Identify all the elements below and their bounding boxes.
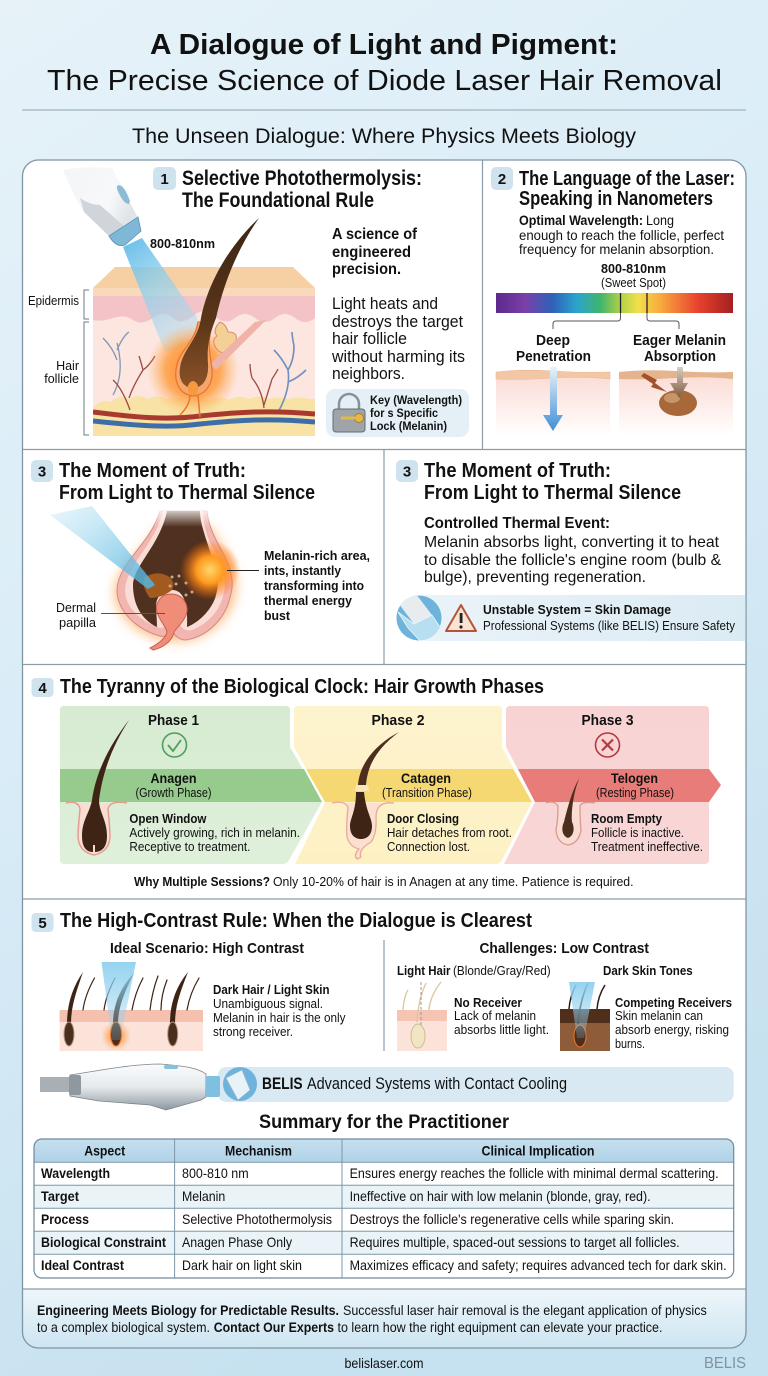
phase 2: catagen: Phase 2 xyxy=(372,712,424,729)
text: dark hair light skin xyxy=(213,983,346,1039)
heading 2: Speaking in Nanometers xyxy=(519,188,713,210)
row: target: Target xyxy=(41,1188,79,1204)
explanatory text 1: precision. xyxy=(332,261,401,278)
icon: cross xyxy=(596,733,620,757)
handpiece xyxy=(63,167,141,246)
text: competing receivers: burns. xyxy=(615,1037,645,1051)
callout: melanin-rich area: ints, instantly xyxy=(264,563,342,578)
banner: BELIS advanced systems: Advanced Systems with Contact Cooling xyxy=(307,1075,567,1093)
website url: belislaser.com xyxy=(344,1355,424,1371)
panel: language of the laser xyxy=(491,167,735,436)
subheading: ideal scenario: Ideal Scenario: High Contrast xyxy=(110,940,304,957)
label: deep penetration xyxy=(516,332,591,365)
row: ideal contrast: Maximizes efficacy and safety; requires advanced tech for dark skin. xyxy=(350,1257,727,1273)
row: process: Destroys the follicle's regenerative cells while sparing skin. xyxy=(350,1211,674,1227)
wavelength description xyxy=(519,212,724,257)
banner: BELIS advanced systems xyxy=(40,1064,734,1110)
explanatory text 1 xyxy=(331,226,465,383)
explanatory text 1: neighbors. xyxy=(332,364,405,383)
illustration: dark hair on light skin xyxy=(60,962,203,1051)
wavelength description: Optimal Wavelength: xyxy=(519,212,643,228)
text: dark hair light skin: strong receiver. xyxy=(213,1025,293,1039)
heading 3: The Moment of Truth: xyxy=(59,460,246,482)
text: no receiver xyxy=(454,996,549,1037)
phase 2: catagen: Door Closing xyxy=(387,811,459,826)
heading: summary: Summary for the Practitioner xyxy=(259,1112,510,1133)
heading 1: Selective Photothermolysis: xyxy=(182,167,422,190)
thermal event text xyxy=(424,515,721,586)
row: target xyxy=(41,1188,651,1204)
heading 1 xyxy=(182,167,422,212)
panel: high-contrast rule xyxy=(32,910,734,1110)
label: eager melanin absorption: Absorption xyxy=(644,348,716,365)
panel: hair growth phases xyxy=(32,676,721,889)
footer call to action: to a complex biological system. xyxy=(37,1319,210,1335)
thermal event text: Melanin absorbs light, converting it to heat xyxy=(424,534,720,551)
text: dark hair light skin: Melanin in hair is the only xyxy=(213,1011,346,1025)
illustration: dark skin xyxy=(560,982,610,1051)
note: multiple sessions: Only 10-20% of hair is in Anagen at any time. Patience is required. xyxy=(273,875,634,889)
callout: dermal papilla xyxy=(56,600,165,630)
heading 5: The High-Contrast Rule: When the Dialogue is Clearest xyxy=(60,910,532,932)
callout: key and lock: Lock (Melanin) xyxy=(370,419,447,433)
title xyxy=(47,29,722,97)
explanatory text 1: hair follicle xyxy=(332,329,407,348)
badge 4 xyxy=(32,678,54,697)
callout: melanin-rich area: bust xyxy=(264,608,291,623)
badge 2 xyxy=(491,167,513,190)
text: competing receivers xyxy=(615,996,732,1051)
label: deep penetration: Deep xyxy=(536,332,570,349)
row: wavelength: 800-810 nm xyxy=(182,1165,249,1181)
heading 3 xyxy=(59,460,315,504)
wavelength description: Long xyxy=(646,212,674,228)
row: biological constraint: Biological Constraint xyxy=(41,1234,166,1250)
panel: selective photothermolysis xyxy=(28,167,469,440)
phase 3: telogen: Treatment ineffective. xyxy=(591,840,703,854)
label: light hair: (Blonde/Gray/Red) xyxy=(453,964,551,978)
label: light hair xyxy=(397,964,551,978)
text: competing receivers: absorb energy, risking xyxy=(615,1023,729,1037)
panel: controlled thermal event xyxy=(396,460,746,645)
illustration: light hair xyxy=(397,982,447,1051)
phase 3: telogen: Follicle is inactive. xyxy=(591,826,684,840)
phase 3: telogen: (Resting Phase) xyxy=(596,786,674,800)
callout: key and lock xyxy=(326,389,469,437)
heading 3 right: The Moment of Truth: xyxy=(424,460,611,482)
table header: Aspect xyxy=(84,1142,125,1158)
footer call to action: to learn how the right equipment can elevate your practice. xyxy=(338,1319,662,1335)
row: ideal contrast: Dark hair on light skin xyxy=(182,1257,302,1273)
phase 2: catagen xyxy=(294,706,532,864)
badge 1 xyxy=(153,167,176,190)
phase 3: telogen: Phase 3 xyxy=(582,712,634,729)
callout: melanin-rich area xyxy=(227,548,370,623)
text: dark hair light skin: Dark Hair / Light Skin xyxy=(213,983,330,997)
footer call to action: Successful laser hair removal is the elegant application of physics xyxy=(343,1302,707,1318)
badge 2: 2 xyxy=(498,171,506,188)
phase 1: anagen: Open Window xyxy=(129,811,207,826)
row: target: Melanin xyxy=(182,1188,225,1204)
text: no receiver: No Receiver xyxy=(454,996,522,1010)
phase 2: catagen: Connection lost. xyxy=(387,840,470,854)
badge 3 right xyxy=(396,460,418,482)
icon: padlock with key xyxy=(333,394,365,432)
heading 3: From Light to Thermal Silence xyxy=(59,482,315,504)
subtitle: The Unseen Dialogue: Where Physics Meets Biology xyxy=(132,125,637,148)
badge 1: 1 xyxy=(160,171,169,188)
badge 3 xyxy=(31,460,53,482)
footer call to action xyxy=(37,1302,707,1335)
icon: cooling tip xyxy=(223,1067,257,1101)
row: target: Ineffective on hair with low melanin (blonde, gray, red). xyxy=(350,1188,651,1204)
row: wavelength xyxy=(41,1165,719,1181)
footer call to action: Contact Our Experts xyxy=(214,1319,334,1335)
phase 3: telogen xyxy=(504,706,721,864)
brand mark: BELIS xyxy=(704,1355,746,1372)
phase 1: anagen xyxy=(60,706,322,864)
summary table xyxy=(34,1139,734,1278)
callout: dermal papilla: Dermal xyxy=(56,600,96,615)
row: wavelength: Ensures energy reaches the follicle with minimal dermal scattering. xyxy=(350,1165,719,1181)
heading 3 right: From Light to Thermal Silence xyxy=(424,482,681,504)
text: no receiver: Lack of melanin xyxy=(454,1009,536,1023)
table header xyxy=(84,1142,594,1158)
safety banner xyxy=(396,594,746,645)
panel: moment of truth illustration xyxy=(31,460,370,650)
table header: Mechanism xyxy=(225,1142,292,1158)
label: light hair: Light Hair xyxy=(397,964,451,978)
safety banner: Unstable System = Skin Damage xyxy=(483,603,671,617)
icon: check xyxy=(162,733,186,757)
title: A Dialogue of Light and Pigment: xyxy=(150,29,618,61)
callout: melanin-rich area: thermal energy xyxy=(264,593,353,608)
wavelength description: frequency for melanin absorption. xyxy=(519,241,714,257)
sweet spot label xyxy=(601,261,666,290)
callout: melanin-rich area: transforming into xyxy=(264,578,364,593)
note: multiple sessions: Why Multiple Sessions? xyxy=(134,875,270,889)
title: The Precise Science of Diode Laser Hair Removal xyxy=(47,65,722,97)
callout: key and lock: Key (Wavelength) xyxy=(370,393,462,407)
phase 3: telogen: Telogen xyxy=(611,771,658,786)
skin diagram: deep penetration xyxy=(496,367,610,436)
icon: handpiece with cable xyxy=(40,1064,220,1110)
callout: dermal papilla: papilla xyxy=(59,615,97,630)
heading 4: The Tyranny of the Biological Clock: Hair Growth Phases xyxy=(60,676,544,698)
text: competing receivers: Competing Receivers xyxy=(615,996,732,1010)
row: process: Selective Photothermolysis xyxy=(182,1211,332,1227)
phase 1: anagen: (Growth Phase) xyxy=(136,786,212,800)
phase 1: anagen: Actively growing, rich in melanin. xyxy=(129,826,300,840)
heading 3 right xyxy=(424,460,681,504)
badge 5 xyxy=(32,913,54,932)
heading 2 xyxy=(519,168,735,210)
phase 1: anagen: Receptive to treatment. xyxy=(129,840,250,854)
skin layer labels: Epidermis xyxy=(28,294,79,308)
explanatory text 1: A science of xyxy=(332,226,418,243)
thermal event text: Controlled Thermal Event: xyxy=(424,515,610,532)
phase 2: catagen: Catagen xyxy=(401,771,451,786)
badge 3: 3 xyxy=(38,464,46,480)
badge 3 right: 3 xyxy=(403,464,411,480)
thermal event text: to disable the follicle's engine room (bulb & xyxy=(424,552,721,569)
thermal event text: bulge), preventing regeneration. xyxy=(424,569,646,586)
phase 1: anagen: Phase 1 xyxy=(148,712,199,729)
explanatory text 1: without harming its xyxy=(331,347,465,366)
phase 1: anagen: Anagen xyxy=(150,771,196,786)
subheading: challenges: Challenges: Low Contrast xyxy=(480,940,649,957)
follicle close-up illustration xyxy=(50,505,240,650)
safety banner: Professional Systems (like BELIS) Ensure Safety xyxy=(483,619,736,633)
callout: key and lock: for s Specific xyxy=(370,406,438,420)
label: eager melanin absorption xyxy=(633,332,726,365)
label: deep penetration: Penetration xyxy=(516,348,591,365)
wavelength description: enough to reach the follicle, perfect xyxy=(519,227,724,243)
label: eager melanin absorption: Eager Melanin xyxy=(633,332,726,349)
sweet spot label: 800-810nm xyxy=(601,261,666,276)
skin layer labels xyxy=(28,290,89,435)
text: competing receivers: Skin melanin can xyxy=(615,1009,703,1023)
row: wavelength: Wavelength xyxy=(41,1165,110,1181)
banner: BELIS advanced systems: BELIS xyxy=(262,1075,303,1093)
row: biological constraint: Anagen Phase Only xyxy=(182,1234,292,1250)
badge 5: 5 xyxy=(38,915,47,932)
row: ideal contrast: Ideal Contrast xyxy=(41,1257,124,1273)
label: dark skin tones: Dark Skin Tones xyxy=(603,964,693,978)
table header: Clinical Implication xyxy=(482,1142,594,1158)
text: dark hair light skin: Unambiguous signal. xyxy=(213,997,323,1011)
callout: melanin-rich area: Melanin-rich area, xyxy=(264,548,370,563)
phase 3: telogen: Room Empty xyxy=(591,811,663,826)
spectrum bar xyxy=(496,293,733,329)
skin layer labels: follicle xyxy=(44,372,79,386)
row: process xyxy=(41,1211,674,1227)
row: ideal contrast xyxy=(41,1257,727,1273)
badge 4: 4 xyxy=(38,680,47,697)
icon: contact cooling tip xyxy=(396,596,442,640)
row: biological constraint xyxy=(41,1234,680,1250)
phase 2: catagen: Hair detaches from root. xyxy=(387,826,512,840)
skin layer labels: Hair xyxy=(56,359,79,373)
text: no receiver: absorbs little light. xyxy=(454,1023,549,1037)
row: biological constraint: Requires multiple, spaced-out sessions to target all follicles. xyxy=(350,1234,680,1250)
footer call to action: Engineering Meets Biology for Predictable Results. xyxy=(37,1302,339,1318)
sweet spot label: (Sweet Spot) xyxy=(601,276,666,290)
phase 2: catagen: (Transition Phase) xyxy=(382,786,472,800)
explanatory text 1: engineered xyxy=(332,244,411,261)
skin cross-section illustration xyxy=(93,218,320,440)
wavelength label: 800-810nm xyxy=(150,236,215,251)
explanatory text 1: destroys the target xyxy=(332,312,463,331)
row: process: Process xyxy=(41,1211,89,1227)
icon: warning triangle xyxy=(446,605,476,631)
explanatory text 1: Light heats and xyxy=(332,294,438,313)
heading 1: The Foundational Rule xyxy=(182,189,374,212)
skin diagram: melanin absorption xyxy=(619,367,733,436)
